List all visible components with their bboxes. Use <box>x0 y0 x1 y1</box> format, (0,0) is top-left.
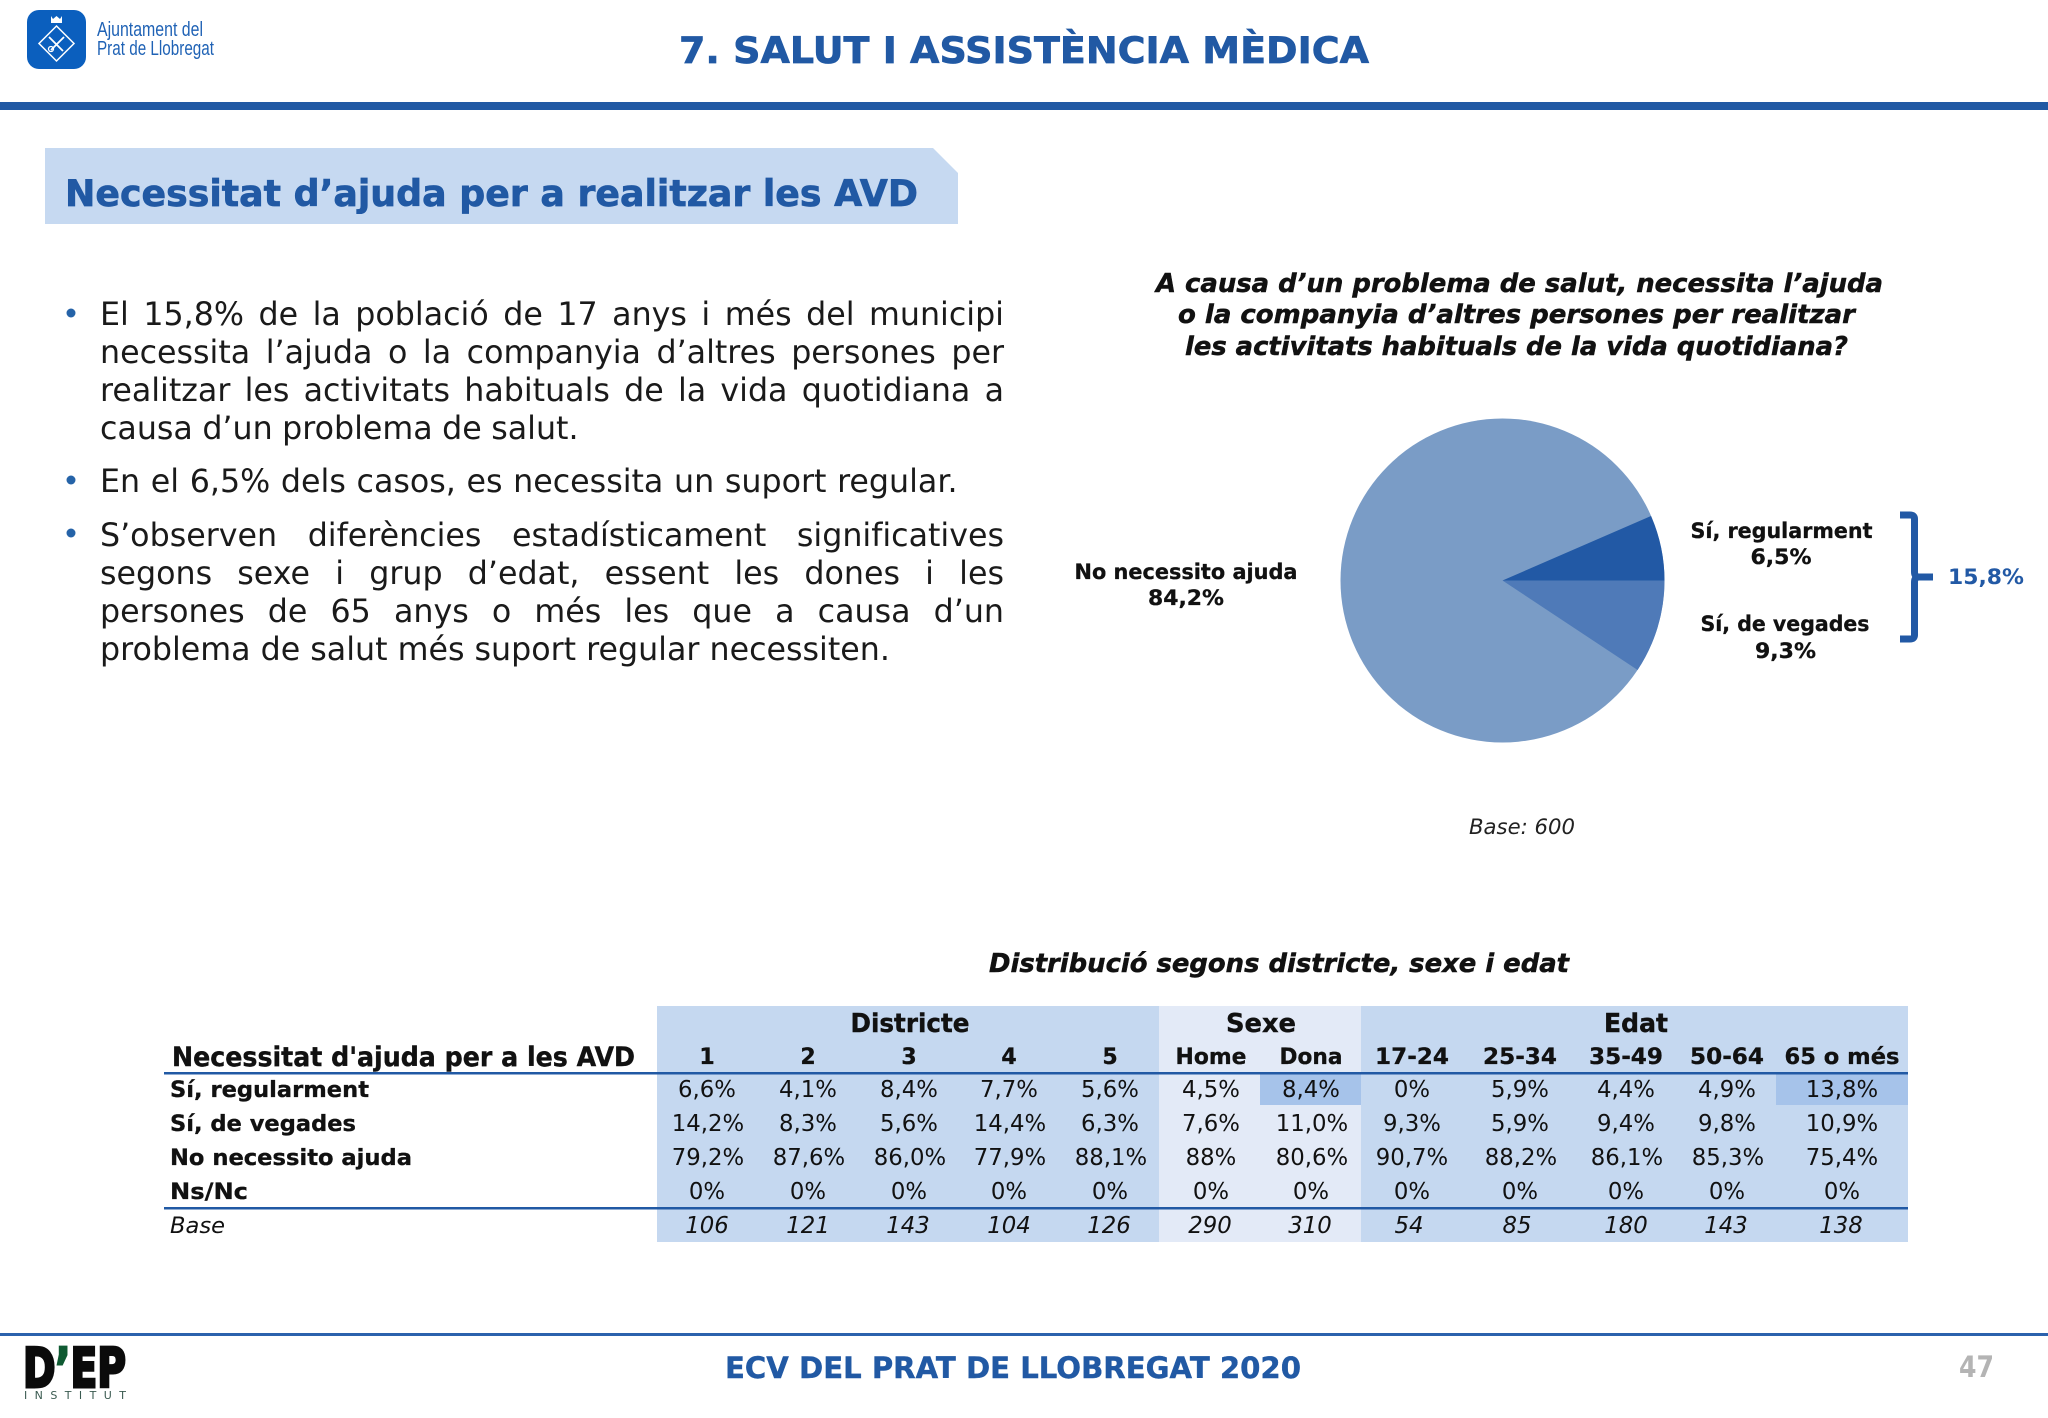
bullet text 1 <box>100 297 1004 447</box>
group headers: Sexe <box>1226 1009 1296 1039</box>
bullet text 3: segons sexe i grup d’edat, essent les dones i les <box>100 556 1004 592</box>
row: ns/nc: 0% <box>790 1179 826 1205</box>
row: no necessito ajuda: 79,2% <box>672 1145 744 1171</box>
row: base: 138 <box>1819 1213 1863 1239</box>
footer logo: D'EP Institut: D’EP <box>23 1337 126 1400</box>
district column band <box>657 1006 1159 1242</box>
pie label: si, de vegades <box>1700 612 1870 663</box>
row: base: 104 <box>987 1213 1031 1239</box>
page title: 7. SALUT I ASSISTÈNCIA MÈDICA <box>679 28 1370 72</box>
row: ns/nc: 0% <box>1824 1179 1860 1205</box>
pie label: no necessito ajuda: No necessito ajuda <box>1074 560 1298 584</box>
row: base: 180 <box>1604 1213 1648 1239</box>
row: si, de vegades: 9,8% <box>1698 1111 1756 1137</box>
row: no necessito ajuda <box>672 1145 1878 1171</box>
row: base: 121 <box>786 1213 830 1239</box>
column headers: Home <box>1176 1045 1246 1070</box>
row: ns/nc: 0% <box>1709 1179 1745 1205</box>
row: no necessito ajuda: 86,0% <box>874 1145 946 1171</box>
row: base: 54 <box>1394 1213 1424 1239</box>
pie label: no necessito ajuda <box>1074 560 1298 610</box>
pie label: si, de vegades: Sí, de vegades <box>1700 612 1870 636</box>
row: ns/nc: 0% <box>1293 1179 1329 1205</box>
row: si, de vegades: 10,9% <box>1806 1111 1878 1137</box>
row: ns/nc <box>689 1179 1860 1205</box>
table title: Distribució segons districte, sexe i edat <box>989 949 1571 979</box>
row labels: Base <box>170 1214 225 1239</box>
row: ns/nc: 0% <box>1193 1179 1229 1205</box>
row: ns/nc: 0% <box>689 1179 725 1205</box>
row: ns/nc: 0% <box>991 1179 1027 1205</box>
row: base: 85 <box>1502 1213 1532 1239</box>
pie label: si, regularment <box>1690 519 1872 569</box>
page number: 47 <box>1959 1350 1994 1384</box>
row: no necessito ajuda: 87,6% <box>773 1145 845 1171</box>
column headers: Dona <box>1280 1045 1342 1070</box>
bullet text 1: El 15,8% de la població de 17 anys i més del municipi <box>100 297 1004 333</box>
column headers: 25-34 <box>1483 1045 1557 1070</box>
row: si, regularment: 0% <box>1394 1077 1430 1103</box>
row: si, de vegades: 6,3% <box>1081 1111 1139 1137</box>
bullet text 1: realitzar les activitats habituals de la vida quotidiana a <box>100 373 1004 409</box>
row labels: Sí, de vegades <box>170 1112 356 1137</box>
row: si, regularment: 4,1% <box>779 1077 837 1103</box>
age column band <box>1361 1006 1908 1242</box>
pie label: si, regularment: 6,5% <box>1750 545 1812 569</box>
highlight cell: dona <box>1260 1074 1361 1105</box>
row: si, regularment: 5,6% <box>1081 1077 1139 1103</box>
row: si, regularment: 7,7% <box>980 1077 1038 1103</box>
section heading banner <box>45 148 958 224</box>
row: si, de vegades: 5,9% <box>1491 1111 1549 1137</box>
pie label: si, de vegades: 9,3% <box>1755 639 1816 663</box>
row: base: 290 <box>1188 1213 1232 1239</box>
row: si, regularment: 8,4% <box>880 1077 938 1103</box>
header logo: Ajuntament del Prat de Llobregat: Ajuntament del <box>97 19 203 41</box>
row: si, regularment: 5,9% <box>1491 1077 1549 1103</box>
bullet text 1: necessita l’ajuda o la companyia d’altres persones per <box>100 335 1004 371</box>
group headers: Edat <box>1604 1009 1668 1039</box>
row: no necessito ajuda: 75,4% <box>1806 1145 1878 1171</box>
row: base: 143 <box>886 1213 930 1239</box>
row: si, de vegades: 8,3% <box>779 1111 837 1137</box>
row: si, de vegades: 7,6% <box>1182 1111 1240 1137</box>
row: base: 310 <box>1288 1213 1332 1239</box>
column headers <box>699 1045 1900 1070</box>
chart base note: Base: 600 <box>1469 815 1575 839</box>
row: si, de vegades: 9,4% <box>1597 1111 1655 1137</box>
row: no necessito ajuda: 88,1% <box>1075 1145 1147 1171</box>
row: no necessito ajuda: 77,9% <box>974 1145 1046 1171</box>
row labels <box>170 1078 412 1239</box>
row: si, regularment: 6,6% <box>678 1077 736 1103</box>
row: no necessito ajuda: 86,1% <box>1591 1145 1663 1171</box>
column headers: 4 <box>1001 1045 1017 1070</box>
row: no necessito ajuda: 88,2% <box>1485 1145 1557 1171</box>
row: si, de vegades: 14,4% <box>974 1111 1046 1137</box>
column headers: 5 <box>1102 1045 1118 1070</box>
row: base: 143 <box>1704 1213 1748 1239</box>
column headers: 35-49 <box>1589 1045 1663 1070</box>
row: si, de vegades: 11,0% <box>1276 1111 1348 1137</box>
row labels: No necessito ajuda <box>170 1146 412 1171</box>
bullet text 3 <box>100 518 1004 668</box>
bullet markers <box>66 308 76 538</box>
row: si, regularment <box>678 1077 1878 1103</box>
row: ns/nc: 0% <box>1608 1179 1644 1205</box>
row: no necessito ajuda: 85,3% <box>1692 1145 1764 1171</box>
column headers: 1 <box>699 1045 715 1070</box>
bullet text 3: S’observen diferències estadísticament significatives <box>100 518 1004 554</box>
group headers <box>850 1009 1668 1039</box>
group headers: Districte <box>850 1009 970 1039</box>
row: si, de vegades: 9,3% <box>1383 1111 1441 1137</box>
footer title: ECV DEL PRAT DE LLOBREGAT 2020 <box>725 1351 1301 1385</box>
row: si, regularment: 4,4% <box>1597 1077 1655 1103</box>
pie label: si, regularment: Sí, regularment <box>1690 519 1872 543</box>
row: si, regularment: 8,4% <box>1282 1077 1340 1103</box>
footer logo: D'EP Institut: INSTITUT <box>24 1389 126 1402</box>
row: ns/nc: 0% <box>891 1179 927 1205</box>
pie chart <box>1340 418 1664 742</box>
data table <box>164 1006 1908 1242</box>
chart question: o la companyia d’altres persones per realitzar <box>1178 300 1857 330</box>
row: si, regularment: 4,5% <box>1182 1077 1240 1103</box>
bullet text 2: En el 6,5% dels casos, es necessita un suport regular. <box>100 464 958 500</box>
bullet text 3: problema de salut més suport regular necessiten. <box>100 632 890 668</box>
row: no necessito ajuda: 80,6% <box>1276 1145 1348 1171</box>
column headers: 50-64 <box>1690 1045 1764 1070</box>
row: ns/nc: 0% <box>1092 1179 1128 1205</box>
bracket total: 15,8% <box>1948 565 2024 589</box>
row: no necessito ajuda: 90,7% <box>1376 1145 1448 1171</box>
row labels: Sí, regularment <box>170 1078 369 1103</box>
row: ns/nc: 0% <box>1502 1179 1538 1205</box>
pie label: no necessito ajuda: 84,2% <box>1148 586 1224 610</box>
table heading: Necessitat d'ajuda per a les AVD <box>172 1042 635 1073</box>
column headers: 17-24 <box>1375 1045 1449 1070</box>
row labels: Ns/Nc <box>170 1180 248 1205</box>
row: si, de vegades: 5,6% <box>880 1111 938 1137</box>
row: si, de vegades: 14,2% <box>672 1111 744 1137</box>
chart question: A causa d’un problema de salut, necessita l’ajuda <box>1154 269 1883 299</box>
bracket <box>1900 515 1933 639</box>
column headers: 2 <box>800 1045 816 1070</box>
bullet text 1: causa d’un problema de salut. <box>100 411 579 447</box>
row: si, regularment: 4,9% <box>1698 1077 1756 1103</box>
header logo: Ajuntament del Prat de Llobregat <box>27 10 214 69</box>
header logo: Ajuntament del Prat de Llobregat: Prat de Llobregat <box>97 38 214 60</box>
row: si, regularment: 13,8% <box>1806 1077 1878 1103</box>
row: no necessito ajuda: 88% <box>1186 1145 1236 1171</box>
chart question <box>1154 269 1883 362</box>
column headers: 3 <box>901 1045 917 1070</box>
row: ns/nc: 0% <box>1394 1179 1430 1205</box>
row: base: 126 <box>1087 1213 1131 1239</box>
highlight cell: 65 o mes <box>1776 1074 1908 1105</box>
column headers: 65 o més <box>1784 1045 1900 1070</box>
bullet text 3: persones de 65 anys o més les que a causa d’un <box>100 594 1004 630</box>
section heading banner: Necessitat d’ajuda per a realitzar les AVD <box>65 172 918 215</box>
row: si, de vegades <box>672 1111 1878 1137</box>
row: base <box>685 1213 1863 1239</box>
chart question: les activitats habituals de la vida quotidiana? <box>1185 332 1848 362</box>
row: base: 106 <box>685 1213 729 1239</box>
sex column band <box>1159 1006 1361 1242</box>
